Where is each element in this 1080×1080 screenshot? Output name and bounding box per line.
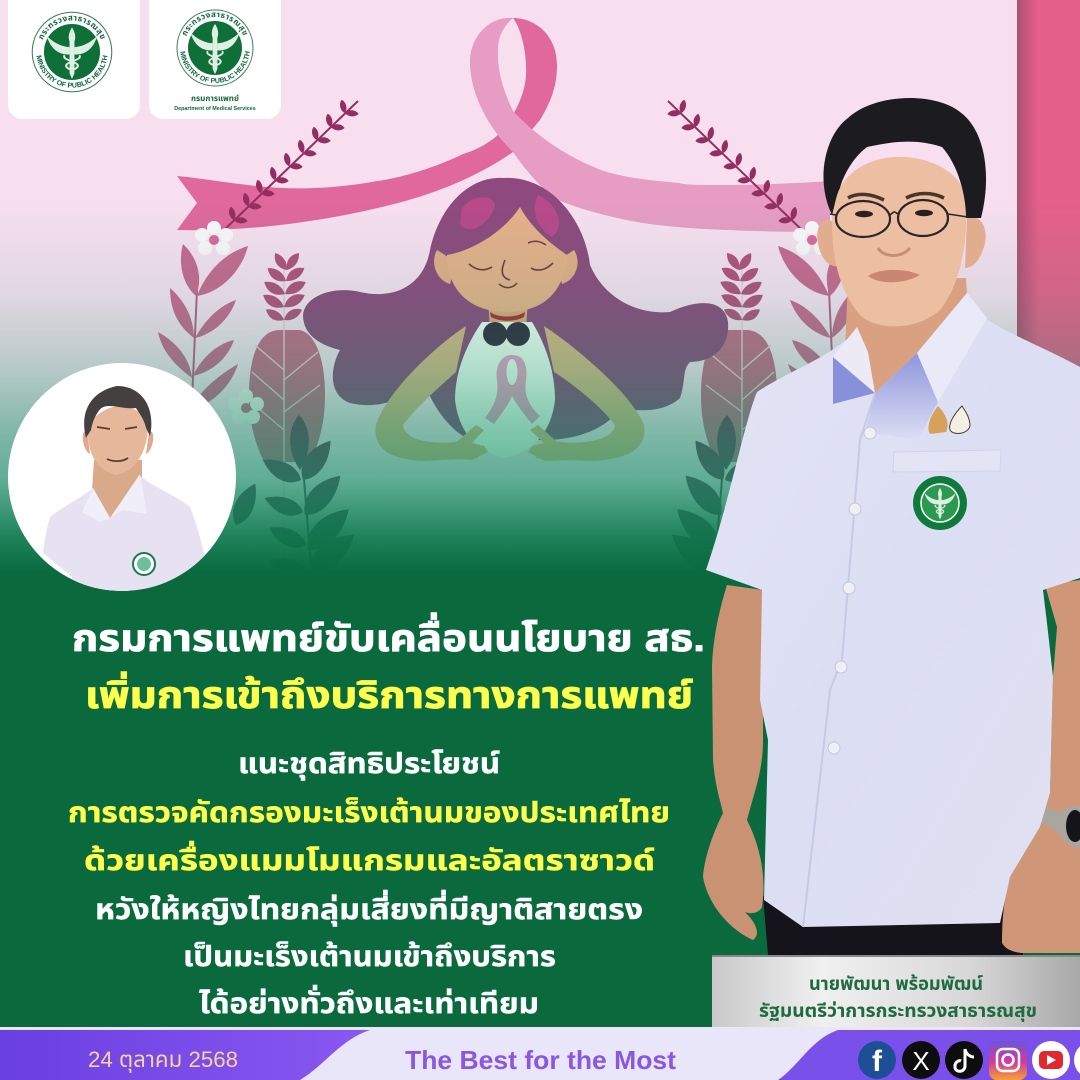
inset ears bbox=[83, 432, 153, 454]
inset face bbox=[88, 406, 148, 475]
minister collar right bbox=[917, 293, 987, 402]
footer left purple panel bbox=[0, 1030, 370, 1080]
minister shirt badge bbox=[913, 476, 967, 530]
woman illustration bbox=[303, 178, 728, 461]
seal: department: กระทรวงสาธารณสุข bbox=[182, 12, 248, 36]
seal: ministry of public health: MINISTRY OF PUBLIC HEALTH bbox=[36, 55, 108, 88]
plant: feathered stem and oval leaf bbox=[249, 250, 325, 560]
hands bbox=[438, 425, 578, 461]
footer right purple panel bbox=[778, 1030, 1080, 1080]
minister trousers bbox=[763, 880, 1023, 955]
icon: instagram bbox=[989, 1041, 1027, 1080]
department name: กรมการแพทย์ bbox=[191, 94, 239, 103]
footer date: 24 ตุลาคม 2568 bbox=[88, 1047, 238, 1073]
ears bbox=[434, 250, 578, 284]
minister lapel shadow bbox=[865, 353, 938, 440]
inset features bbox=[97, 427, 137, 461]
minister pocket flap bbox=[893, 450, 1001, 472]
icon: clipped extra bbox=[1074, 1041, 1080, 1079]
sprig: top-left berry branch bbox=[222, 99, 359, 232]
inset shirt bbox=[43, 476, 205, 600]
seal: department: MINISTRY OF PUBLIC HEALTH bbox=[180, 51, 250, 83]
icon: youtube bbox=[1032, 1041, 1070, 1079]
inset collar bbox=[82, 474, 147, 522]
footer slogan: The Best for the Most bbox=[405, 1045, 676, 1075]
inset hair bbox=[84, 386, 151, 438]
sprig and flower: right mirrored bbox=[667, 99, 831, 255]
minister watch bbox=[1041, 806, 1080, 848]
minister collar inner bbox=[833, 357, 875, 404]
icon: facebook bbox=[858, 1041, 896, 1079]
body text block bbox=[68, 748, 670, 1019]
neck ribbon bbox=[490, 312, 525, 321]
name plate name: นายพัฒนา พร้อมพัฒน์ bbox=[809, 973, 983, 995]
department name english: Department of Medical Services bbox=[174, 106, 256, 112]
name plate role: รัฐมนตรีว่าการกระทรวงสาธารณสุข bbox=[759, 1000, 1037, 1022]
chest ribbon bbox=[485, 355, 540, 424]
icon: X bbox=[902, 1041, 940, 1079]
flower: white top bbox=[195, 221, 233, 255]
sprig and flower: left bbox=[195, 99, 359, 255]
minister nose bbox=[878, 248, 910, 256]
hair bbox=[303, 178, 728, 440]
dress bbox=[455, 322, 555, 458]
solid green panel bbox=[0, 572, 1080, 1027]
minister eyes bbox=[855, 210, 933, 217]
body line 6: ได้อย่างทั่วถึงและเท่าเทียม bbox=[199, 984, 539, 1019]
hair highlights bbox=[460, 195, 559, 237]
icon: X: X bbox=[912, 1046, 930, 1076]
plants: left side bbox=[158, 244, 361, 584]
minister shirt placket bbox=[803, 393, 875, 927]
minister eyebrows bbox=[848, 194, 944, 200]
seal: department bbox=[176, 10, 254, 86]
plants: right side mirrored bbox=[665, 244, 868, 584]
body line 4: หวังให้หญิงไทยกลุ่มเสี่ยงที่มีญาติสายตรง bbox=[95, 889, 643, 926]
social icons bbox=[858, 1041, 1080, 1080]
plant: tall flower stem left bbox=[158, 244, 248, 410]
icon: facebook: f bbox=[872, 1045, 883, 1078]
awareness ribbon bbox=[177, 18, 830, 232]
plant: dark lower foliage bbox=[227, 415, 361, 584]
minister glasses bbox=[830, 200, 968, 237]
portrait: inset official bbox=[8, 363, 236, 600]
arms bbox=[375, 326, 645, 461]
logo card: department of medical services bbox=[149, 0, 281, 119]
collar bbox=[483, 322, 530, 346]
title line 2: เพิ่มการเข้าถึงบริการทางการแพทย์ bbox=[85, 671, 693, 716]
right pink stripe bbox=[1017, 0, 1080, 640]
minister right arm bbox=[1002, 580, 1080, 953]
minister pins bbox=[928, 406, 970, 434]
inset neck bbox=[92, 460, 142, 520]
face details bbox=[469, 241, 553, 288]
title block bbox=[72, 612, 705, 716]
ribbon: dark strand with left tail bbox=[177, 18, 557, 230]
footer bar bbox=[0, 1027, 1080, 1080]
minister face bbox=[832, 157, 966, 326]
neck bbox=[488, 300, 528, 338]
minister collar left bbox=[833, 327, 875, 393]
flower: small lower bbox=[228, 389, 264, 424]
name plate bbox=[712, 955, 1080, 1027]
logo card: ministry bbox=[8, 0, 140, 119]
minister ears bbox=[817, 217, 986, 268]
minister buttons bbox=[828, 427, 876, 754]
seal: ministry of public health: กระทรวงสาธารณสุข bbox=[39, 16, 105, 40]
body line 5: เป็นมะเร็งเต้านมเข้าถึงบริการ bbox=[183, 941, 556, 972]
icon: tiktok bbox=[945, 1041, 983, 1079]
body line 3: ด้วยเครื่องแมมโมแกรมและอัลตราซาวด์ bbox=[84, 840, 655, 876]
title line 1: กรมการแพทย์ขับเคลื่อนนโยบาย สธ. bbox=[72, 612, 705, 659]
face bbox=[447, 207, 567, 312]
body line 2: การตรวจคัดกรองมะเร็งเต้านมของประเทศไทย bbox=[68, 797, 670, 828]
portrait: minister bbox=[703, 98, 1080, 955]
seal: ministry of public health bbox=[32, 12, 112, 92]
body line 1: แนะชุดสิทธิประโยชน์ bbox=[238, 748, 500, 780]
minister mouth bbox=[868, 270, 920, 282]
minister shirt bbox=[706, 293, 1080, 927]
minister left arm bbox=[703, 585, 763, 940]
inset badge bbox=[133, 553, 155, 575]
ribbon: light strand with right tail bbox=[470, 18, 830, 232]
minister hair bbox=[823, 98, 986, 218]
minister neck bbox=[845, 278, 967, 393]
